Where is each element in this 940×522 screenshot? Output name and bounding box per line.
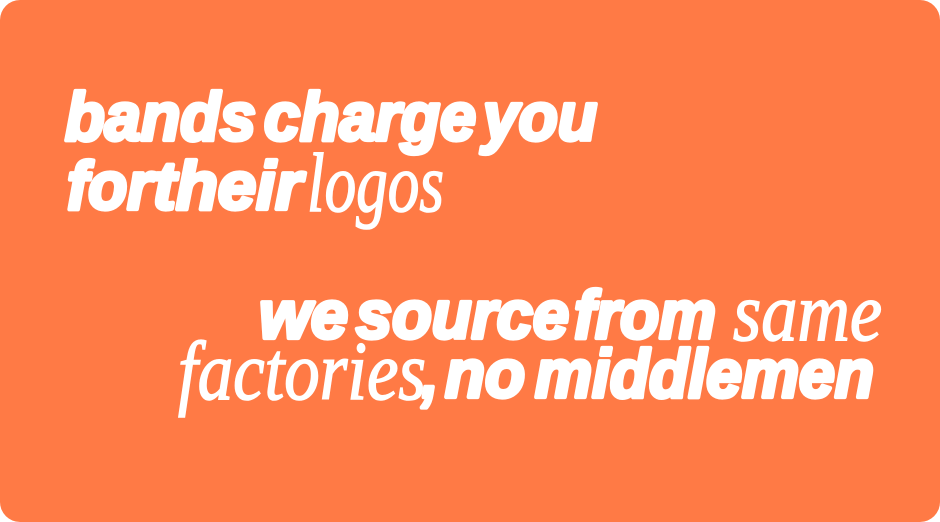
- heading: we source from same factories, no middlemen: [178, 266, 882, 418]
- heading: bands charge you for their logos: [65, 79, 597, 230]
- heading: we source from same factories, no middlemen: same: [733, 266, 882, 359]
- heading: bands charge you for their logos: their: [153, 148, 306, 224]
- heading: we source from same factories, no middlemen: no: [445, 336, 525, 412]
- heading: we source from same factories, no middlemen: factories: [178, 325, 426, 418]
- heading: bands charge you for their logos: for: [67, 148, 155, 224]
- heading: we source from same factories, no middlemen: source: [356, 277, 569, 353]
- heading: we source from same factories, no middlemen: from: [574, 277, 716, 353]
- heading: bands charge you for their logos: you: [480, 79, 597, 155]
- heading: we source from same factories, no middlemen: we: [259, 277, 348, 353]
- heading: we source from same factories, no middlemen: middlemen: [535, 336, 874, 412]
- heading: bands charge you for their logos: charge: [264, 79, 476, 155]
- heading: bands charge you for their logos: logos: [307, 137, 444, 230]
- heading: bands charge you for their logos: bands: [65, 79, 256, 155]
- heading: we source from same factories, no middlemen: ,: [421, 336, 438, 412]
